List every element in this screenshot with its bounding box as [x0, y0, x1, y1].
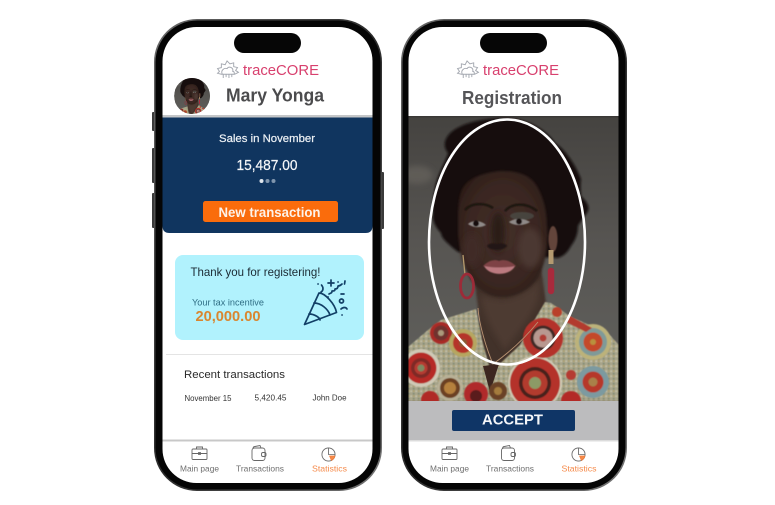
- incentive label: Your tax incentive: [192, 298, 264, 308]
- dynamic island: [234, 33, 301, 53]
- logo: traceCORE: [243, 63, 319, 79]
- nav: statistics: [312, 448, 347, 474]
- sales amount: 15,487.00: [236, 158, 298, 174]
- logo: [458, 61, 559, 79]
- face outline oval: [429, 120, 585, 364]
- card heading: Thank you for registering!: [190, 265, 320, 279]
- sales label: Sales in November: [219, 133, 315, 145]
- logo: traceCORE: [483, 63, 559, 79]
- recent transactions heading: Recent transactions: [184, 369, 286, 381]
- transaction row: 5,420.45: [254, 394, 287, 402]
- nav: statistics: [562, 448, 596, 474]
- icon: party popper: [304, 280, 347, 324]
- nav divider: [162, 440, 372, 442]
- phone: registration: [400, 19, 628, 491]
- carousel dots: [260, 179, 276, 183]
- nav: statistics: Statistics: [312, 464, 347, 474]
- logo: [218, 61, 319, 79]
- button: accept: ACCEPT: [482, 412, 543, 428]
- transaction row: [184, 394, 346, 403]
- dynamic island: [480, 33, 547, 53]
- button: new transaction: New transaction: [218, 205, 320, 220]
- nav: transactions: Transactions: [236, 464, 284, 474]
- incentive amount: 20,000.00: [196, 309, 260, 325]
- header divider: [162, 115, 372, 118]
- button: accept: [452, 410, 575, 431]
- transaction row: John Doe: [312, 394, 346, 402]
- nav: transactions: Transactions: [486, 464, 534, 474]
- divider: [166, 354, 372, 355]
- phone: dashboard: [152, 19, 384, 491]
- panel: sales summary: [162, 118, 372, 233]
- nav: transactions: [236, 446, 284, 474]
- accept band: [408, 401, 618, 440]
- transaction row: November 15: [184, 394, 232, 403]
- button: new transaction: [203, 201, 338, 222]
- user name: Mary Yonga: [226, 86, 325, 106]
- nav: statistics: Statistics: [562, 464, 596, 474]
- panel: tax incentive card: [175, 255, 364, 340]
- nav: main page: [430, 447, 469, 474]
- phone body: [154, 19, 382, 491]
- nav: main page: Main page: [430, 464, 469, 474]
- nav: transactions: [486, 446, 534, 474]
- avatar: [174, 78, 210, 114]
- portrait photo: [408, 116, 618, 401]
- side buttons: [152, 112, 384, 229]
- nav divider: [408, 440, 618, 442]
- nav: main page: Main page: [180, 464, 219, 474]
- screen title: Registration: [462, 88, 562, 108]
- bottom navigation: [430, 446, 596, 474]
- bottom navigation: [180, 446, 347, 474]
- phone body: [401, 19, 627, 491]
- nav: main page: [180, 447, 219, 474]
